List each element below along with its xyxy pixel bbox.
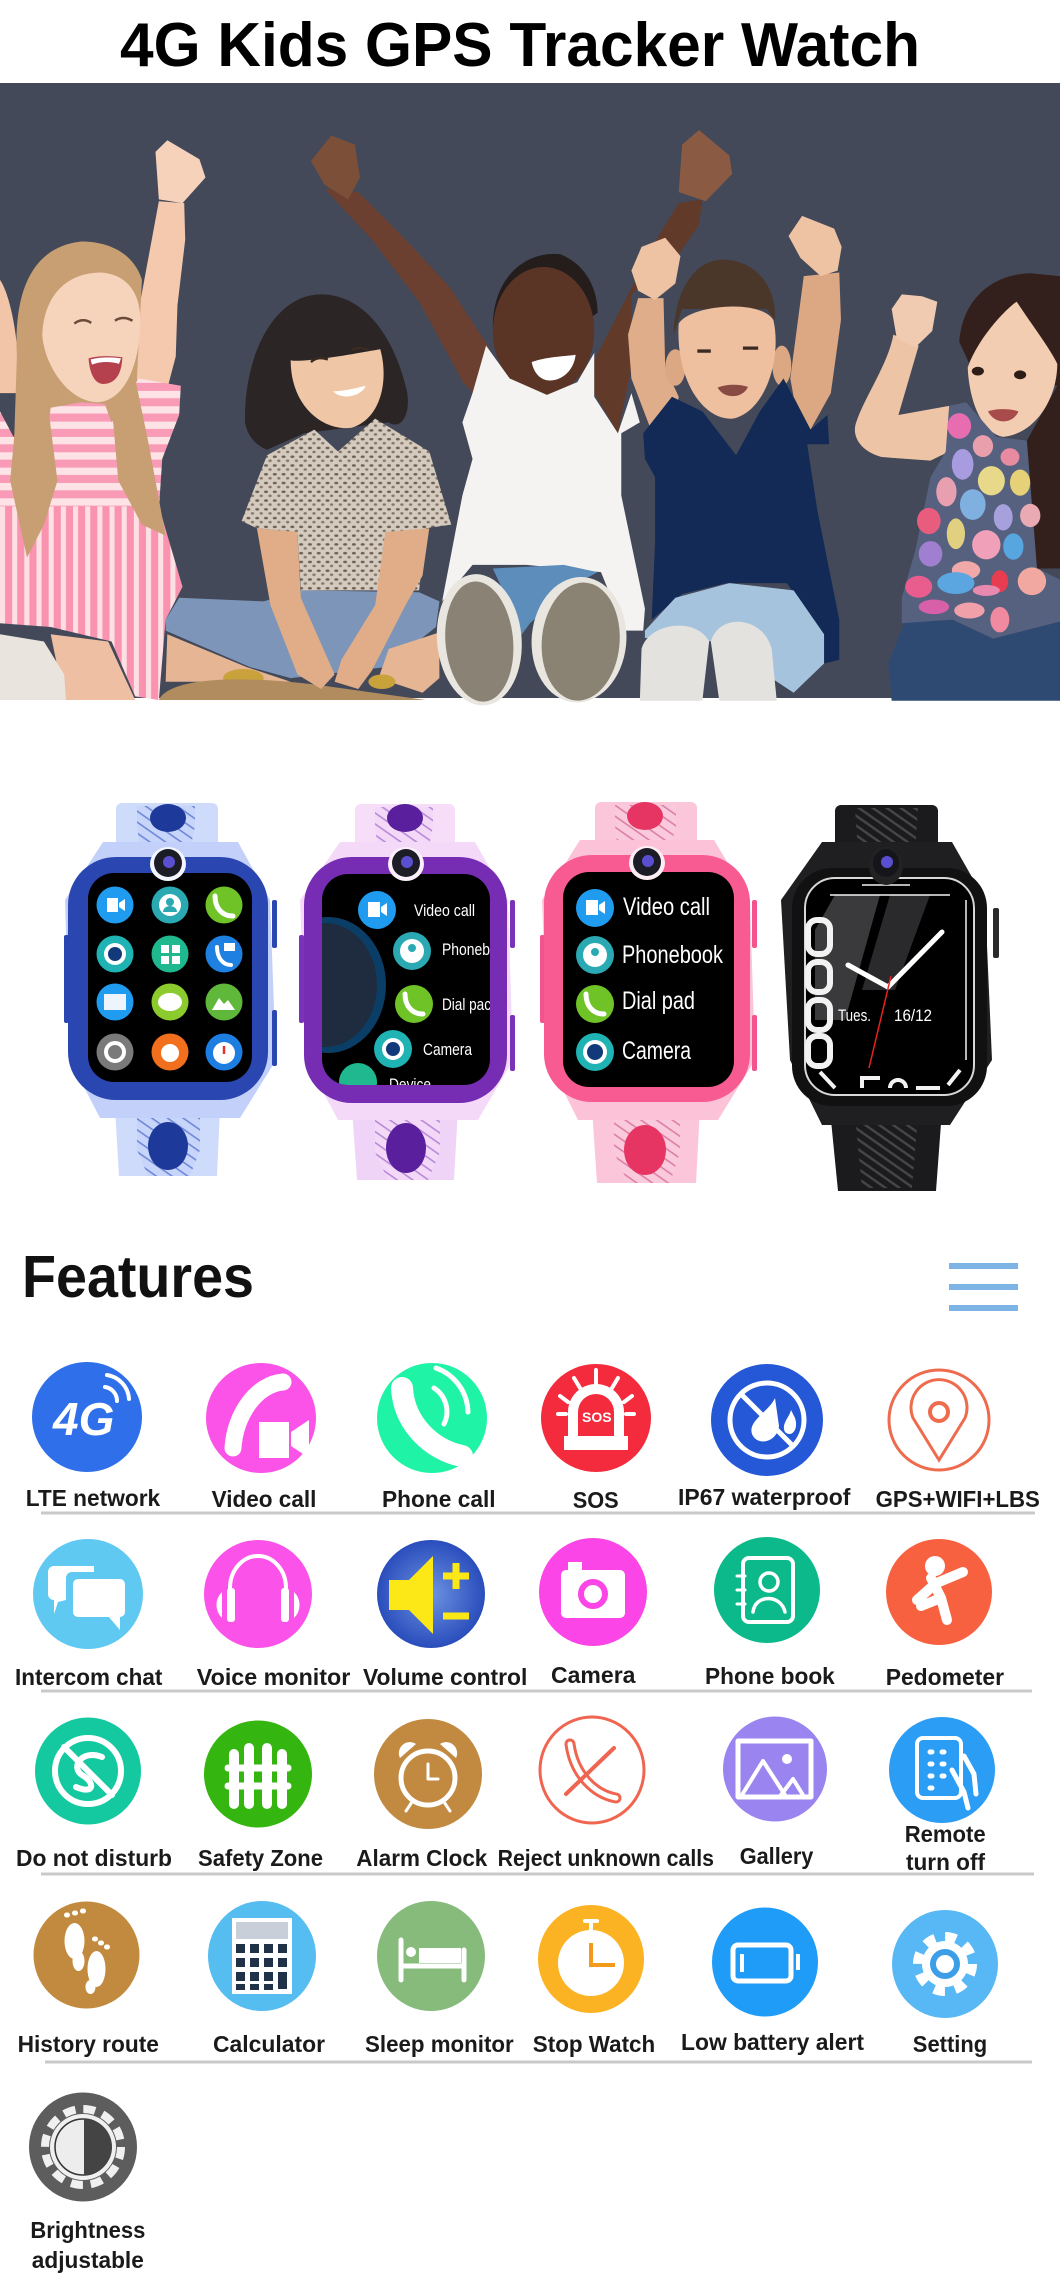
feature: Phone call — [377, 1363, 496, 1512]
watch: purple — [299, 804, 515, 1180]
label: GPS+WIFI+LBS — [876, 1486, 1040, 1512]
feature: SOS — [541, 1364, 651, 1513]
icon: calculator — [208, 1901, 316, 2011]
label: Do not disturb — [16, 1845, 172, 1871]
camera — [869, 847, 903, 885]
label: Reject unknown calls — [498, 1845, 714, 1871]
icon: menu — [949, 1263, 1018, 1311]
label: History route — [18, 2031, 159, 2057]
feature: Safety Zone — [198, 1720, 323, 1871]
icon: alarm clock — [374, 1719, 482, 1829]
feature: GPS+WIFI+LBS — [876, 1370, 1040, 1512]
kid: girl with black bob — [159, 294, 451, 700]
label: Phone book — [705, 1663, 836, 1689]
photo: five cheering kids — [0, 83, 1060, 710]
screen: earth and menu — [322, 891, 490, 1085]
camera — [629, 846, 665, 880]
feature: Camera — [539, 1538, 647, 1688]
screen: earth and menu: Video call — [414, 901, 475, 920]
screen: earth and menu: Phoneb — [442, 940, 490, 959]
icon: rejected call — [540, 1717, 644, 1823]
label: Volume control — [363, 1664, 527, 1690]
label: Intercom chat — [15, 1664, 163, 1690]
kid: left arm of girl in white — [311, 135, 490, 397]
icon: contact book — [714, 1537, 820, 1643]
feature: Gallery — [723, 1716, 827, 1869]
label: Remote — [905, 1821, 986, 1847]
icon: chat bubbles — [33, 1539, 143, 1649]
feature: Sleep monitor — [365, 1901, 514, 2057]
icon: footprints — [34, 1902, 140, 2008]
icon: battery — [712, 1908, 818, 2016]
kid: girl in polka dot shirt — [855, 273, 1060, 701]
feature: Brightness adjustable — [29, 2092, 145, 2273]
clock hands — [848, 932, 942, 1068]
screen menu: Camera — [622, 1037, 691, 1065]
dial glare — [815, 895, 880, 1020]
label: turn off — [906, 1849, 985, 1875]
label: Sleep monitor — [365, 2031, 514, 2057]
icon: 4G — [32, 1362, 142, 1472]
screen: earth and menu: Device — [389, 1075, 431, 1094]
icon: camera — [539, 1538, 647, 1646]
feature: Stop Watch — [533, 1905, 655, 2057]
kid: blonde girl in pink dress — [0, 140, 206, 700]
feature: Pedometer — [886, 1539, 1004, 1690]
icon: speaker plus minus — [377, 1540, 485, 1648]
icon: stopwatch — [538, 1905, 644, 2013]
icon: handset — [377, 1363, 487, 1473]
icon: 4G: 4G — [52, 1393, 114, 1445]
title: 4G Kids GPS Tracker Watch — [120, 11, 920, 80]
watch: black — [781, 805, 999, 1191]
feature: Phone book — [705, 1537, 836, 1689]
feature: Calculator — [208, 1901, 325, 2057]
feature: Volume control — [363, 1540, 527, 1690]
kid: girl in white top — [431, 130, 732, 710]
icon: bed — [377, 1901, 485, 2011]
label: Pedometer — [886, 1664, 1004, 1690]
dial numerals — [808, 885, 966, 1088]
label: Phone call — [382, 1486, 496, 1512]
shirt polka dots — [905, 413, 1046, 632]
icon: brightness — [29, 2092, 137, 2202]
watch: black: Tues. — [838, 1006, 871, 1025]
screen menu: Dial pad — [622, 987, 695, 1015]
label: adjustable — [32, 2247, 144, 2273]
feature: Remote turn off — [889, 1717, 995, 1875]
watch: blue — [64, 803, 277, 1176]
icon: picture — [723, 1716, 827, 1822]
feature: Setting — [892, 1910, 998, 2057]
label: Gallery — [740, 1843, 813, 1869]
label: Alarm Clock — [356, 1845, 488, 1871]
screen: earth and menu: Dial pac — [442, 995, 491, 1014]
feature: Video call — [206, 1363, 316, 1512]
label: IP67 waterproof — [678, 1484, 851, 1510]
label: LTE network — [26, 1485, 161, 1511]
label: Video call — [212, 1486, 316, 1512]
heading: Features: Features — [22, 1244, 254, 1310]
feature: Low battery alert — [681, 1908, 864, 2055]
screen menu — [576, 889, 723, 1071]
screen icons — [96, 886, 242, 1070]
label: Voice monitor — [197, 1664, 350, 1690]
screen menu: Phonebook — [622, 941, 723, 969]
label: SOS — [573, 1487, 619, 1513]
feature: LTE network — [26, 1362, 161, 1511]
icon: handset and camera — [206, 1363, 316, 1473]
feature: IP67 waterproof — [678, 1364, 851, 1510]
feature: Intercom chat — [15, 1539, 163, 1690]
screen menu: Video call — [623, 893, 710, 921]
icon: map pin — [889, 1370, 989, 1470]
label: Calculator — [213, 2031, 325, 2057]
kid: boy in navy tee — [628, 216, 842, 701]
feature: Voice monitor — [197, 1540, 350, 1690]
watch: black: 16/12 — [894, 1006, 932, 1025]
icon: siren — [541, 1364, 651, 1472]
feature: History route — [18, 1902, 159, 2057]
label: Setting — [913, 2031, 987, 2057]
icon: crossed drops — [711, 1364, 823, 1476]
icon: no disturb — [35, 1718, 141, 1824]
camera — [388, 847, 424, 881]
icon: fence — [204, 1720, 312, 1828]
icon: siren: SOS — [582, 1409, 612, 1425]
icon: hand on phone — [889, 1717, 995, 1823]
label: Stop Watch — [533, 2031, 655, 2057]
icon: runner — [886, 1539, 992, 1645]
label: Brightness — [30, 2217, 145, 2243]
camera — [150, 847, 186, 881]
label: Low battery alert — [681, 2029, 864, 2055]
feature: Do not disturb — [16, 1718, 172, 1871]
icon: gear — [892, 1910, 998, 2018]
label: Camera — [551, 1662, 636, 1688]
feature: Reject unknown calls — [498, 1717, 714, 1871]
watch: pink — [540, 802, 757, 1183]
icon: headphones — [204, 1540, 312, 1648]
label: Safety Zone — [198, 1845, 323, 1871]
feature: Alarm Clock — [356, 1719, 488, 1871]
screen: earth and menu: Camera — [423, 1040, 472, 1059]
